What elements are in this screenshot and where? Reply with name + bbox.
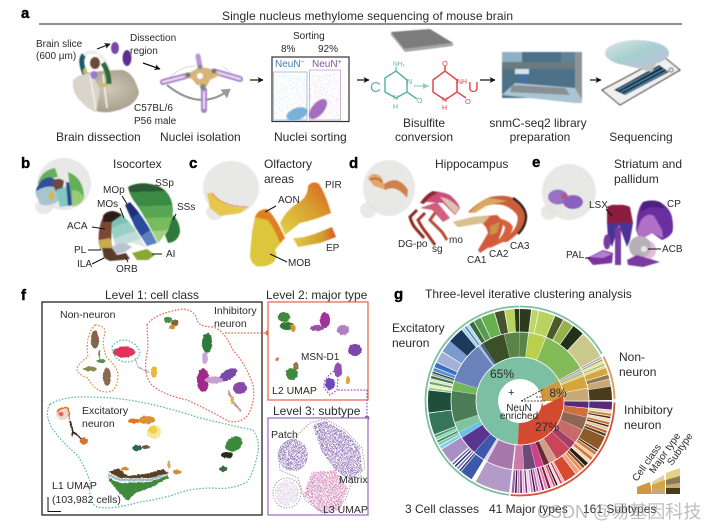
outline: non-neuron xyxy=(77,325,118,392)
chart: FACS sorting scatter: NeuN xyxy=(275,59,301,70)
region labels: ILA xyxy=(77,259,92,270)
clusters: inhibitory xyxy=(135,317,247,411)
region labels: ACA xyxy=(67,221,88,232)
label: NeuN enriched: enriched xyxy=(500,411,538,422)
region labels: SSs xyxy=(177,202,195,213)
step caption: nuclei sorting: Nuclei sorting xyxy=(274,130,347,144)
leader lines xyxy=(88,196,176,264)
step caption: library preparation: preparation xyxy=(510,130,570,144)
scatter cloud: NeuN positive xyxy=(310,74,340,120)
heading: striatum and pallidum: Striatum and xyxy=(614,157,682,171)
icon: cytosine molecule: C xyxy=(370,79,381,96)
workflow title: Single nucleus methylome sequencing of mouse brain xyxy=(222,9,513,23)
arrow: C to U xyxy=(414,85,429,87)
watermark: CSDN @易基因科技 xyxy=(537,502,701,522)
label: non-neuron: neuron xyxy=(619,365,656,379)
icon: dissection region pieces xyxy=(111,42,132,66)
chart: L2 UMAP xyxy=(268,302,368,400)
bottom labels: 161 Subtypes xyxy=(583,502,656,516)
panel: a - workflow xyxy=(21,5,682,144)
clusters: major types xyxy=(276,312,362,390)
region labels: EP xyxy=(326,243,340,254)
outline: inhibitory neuron xyxy=(146,309,254,422)
icon: cytosine molecule: NH₂ xyxy=(393,61,405,68)
region labels: SSp xyxy=(155,178,174,189)
leader lines xyxy=(265,206,287,262)
heading: isocortex: Isocortex xyxy=(113,157,162,171)
legend labels xyxy=(630,431,696,484)
brain region 3D: cortex xyxy=(98,183,180,261)
label: 8 percent: 8% xyxy=(549,386,567,400)
icon: uracil molecule: H xyxy=(442,105,447,112)
chart: L1 UMAP xyxy=(42,302,262,515)
icon: centrifuge rotor xyxy=(163,56,240,110)
label: inhibitory neuron: Inhibitory xyxy=(214,305,257,317)
icon: cytosine molecule: H xyxy=(393,104,398,111)
brain regions: striatum and pallidum xyxy=(587,200,673,267)
brain regions: olfactory xyxy=(250,182,336,266)
panel: e - striatum and pallidum xyxy=(532,154,683,267)
region labels: PIR xyxy=(325,180,342,191)
region labels: sg xyxy=(432,244,443,255)
outline: excitatory neuron xyxy=(47,397,258,508)
label: non-neuron: Non-neuron xyxy=(60,309,116,321)
panel: f - UMAP xyxy=(21,287,369,516)
chart: FACS sorting scatter: + xyxy=(338,59,342,66)
brain slice label: Brain slice xyxy=(36,39,82,50)
heading: striatum and pallidum: pallidum xyxy=(614,172,659,186)
region labels: CP xyxy=(667,199,681,210)
connector: L2 to L3 xyxy=(338,390,369,420)
arrow: bisulfite to library xyxy=(480,79,495,81)
panel letter f: f xyxy=(21,287,27,304)
region labels: ORB xyxy=(116,264,138,275)
panel letter b: b xyxy=(21,155,30,172)
dashed indicator xyxy=(521,389,545,401)
icon: uracil molecule xyxy=(433,59,479,112)
outline: MSN-D1 xyxy=(324,370,338,395)
leader lines xyxy=(585,209,661,258)
mouse strain label: P56 male xyxy=(134,116,177,127)
icon: well plate xyxy=(391,29,453,52)
region labels: MOs xyxy=(97,199,118,210)
label: L1 UMAP: L1 UMAP xyxy=(52,480,97,492)
label: inhibitory neuron: neuron xyxy=(624,418,661,432)
region labels: DG-po xyxy=(398,239,427,250)
icon: uracil molecule: NH xyxy=(457,79,467,86)
label: MSN-D1: MSN-D1 xyxy=(301,352,340,363)
dissection region label: Dissection xyxy=(130,33,176,44)
panel letter g: g xyxy=(394,286,403,303)
bottom labels: 41 Major types xyxy=(489,502,568,516)
legend labels: Subtype xyxy=(665,431,696,468)
axis arrows xyxy=(48,497,61,512)
chart: FACS sorting scatter xyxy=(272,57,349,123)
icon: whole brain isocortex location xyxy=(35,158,91,214)
region labels: CA2 xyxy=(489,249,509,260)
step caption: brain dissection: Brain dissection xyxy=(56,130,141,144)
legend labels: Major type xyxy=(647,431,683,476)
brain regions: CA fields xyxy=(453,196,526,253)
chart: sunburst xyxy=(426,306,614,496)
panel letter a: a xyxy=(21,5,30,22)
chart: L3 UMAP xyxy=(268,418,368,516)
sorting labels: Sorting xyxy=(293,31,325,42)
label: L1 UMAP: (103,982 cells) xyxy=(52,494,121,506)
sunburst ring dividers xyxy=(451,332,589,470)
brain slice label: (600 µm) xyxy=(36,51,76,62)
region labels: MOp xyxy=(103,185,125,196)
bottom labels: 3 Cell classes xyxy=(405,502,479,516)
scatter cloud: NeuN negative xyxy=(274,74,307,120)
icon: whole brain olfactory location xyxy=(203,161,259,220)
step caption: library preparation: snmC-seq2 library xyxy=(489,116,587,130)
ring: major types xyxy=(464,344,576,458)
heading: level 1: Level 1: cell class xyxy=(105,288,199,302)
icon: cytosine molecule: N xyxy=(393,95,398,102)
panel: b - isocortex xyxy=(21,155,195,275)
region labels: PAL xyxy=(566,250,585,261)
panel letter d: d xyxy=(349,155,358,172)
label: non-neuron: Non- xyxy=(619,350,645,364)
label: matrix: Matrix xyxy=(339,474,368,486)
outline: non-neuron pink cluster xyxy=(112,340,140,362)
brain regions: dentate gyrus xyxy=(410,191,460,245)
icon: uracil molecule: O xyxy=(442,59,448,68)
ring: cell classes xyxy=(487,368,553,434)
chart: FACS sorting scatter: NeuN xyxy=(312,59,338,70)
sorting labels: 8% xyxy=(281,44,296,55)
heading: olfactory areas: Olfactory xyxy=(264,157,312,171)
mouse strain label: C57BL/6 xyxy=(134,103,173,114)
arrow: library to sequencing xyxy=(590,79,601,81)
label: excitatory neuron: Excitatory xyxy=(392,321,445,335)
icon: uracil molecule: O xyxy=(465,97,471,106)
arrow: region to isolation xyxy=(143,63,160,69)
cluster: pink non-neuron xyxy=(113,346,135,358)
label: NeuN enriched: NeuN xyxy=(506,403,532,414)
outer arc: class colours xyxy=(426,306,614,496)
icon: uracil molecule: N xyxy=(442,97,447,104)
region labels: CA1 xyxy=(467,255,487,266)
region labels: MOB xyxy=(288,258,311,269)
panel letter e: e xyxy=(532,154,540,171)
arrow: sorting to bisulfite xyxy=(357,79,369,81)
label: 27 percent: 27% xyxy=(535,420,559,434)
icon: sequencing wafer xyxy=(605,40,669,72)
region labels: ACB xyxy=(662,244,683,255)
label: excitatory neuron: neuron xyxy=(392,336,429,350)
dissection region label: region xyxy=(130,46,158,57)
legend labels: Cell class xyxy=(630,442,664,484)
heading: hippocampus: Hippocampus xyxy=(435,157,508,171)
heading: level 3: Level 3: subtype xyxy=(273,404,361,418)
step caption: bisulfite conversion: Bisulfite xyxy=(403,116,445,130)
label: inhibitory neuron: Inhibitory xyxy=(624,403,673,417)
icon: mouse brain with dissected slice xyxy=(73,52,139,112)
region labels: mo xyxy=(449,235,463,246)
label: inhibitory neuron: neuron xyxy=(214,318,247,330)
arrow: slice to region xyxy=(97,44,110,49)
panel: d - hippocampus xyxy=(349,155,530,266)
ring: subtypes xyxy=(440,320,600,482)
heading: olfactory areas: areas xyxy=(264,172,294,186)
label: patch: Patch xyxy=(271,429,298,441)
heading: clustering analysis: Three-level iterative clustering analysis xyxy=(425,287,632,301)
label: excitatory neuron: Excitatory xyxy=(82,405,128,417)
label: L2 UMAP: L2 UMAP xyxy=(272,385,317,397)
arrow: isolation to sorting xyxy=(250,79,263,81)
region labels: CA3 xyxy=(510,241,530,252)
panel: c - olfactory areas xyxy=(189,155,342,269)
chart: FACS sorting scatter: − xyxy=(301,59,305,66)
panel letter c: c xyxy=(189,155,197,172)
clusters: subtypes xyxy=(275,421,362,513)
region labels: PL xyxy=(74,245,87,256)
outline: patch and matrix xyxy=(273,419,365,514)
connector: L1 to L2 xyxy=(225,330,271,336)
step caption: bisulfite conversion: conversion xyxy=(395,130,453,144)
clusters: excitatory xyxy=(56,408,245,501)
step caption: sequencing: Sequencing xyxy=(609,130,673,144)
clusters: non-neuron xyxy=(83,331,111,386)
icon: whole brain hippocampus location xyxy=(360,160,415,218)
icon: whole brain striatum location xyxy=(541,164,596,220)
label: 65 percent: 65% xyxy=(490,367,514,381)
legend: ring key wedge xyxy=(630,431,696,494)
icon: cytosine molecule xyxy=(370,61,423,111)
icon: flow cell xyxy=(602,57,680,105)
label: excitatory neuron: neuron xyxy=(82,418,115,430)
sorting labels: 92% xyxy=(318,44,338,55)
icon: liquid handling machine xyxy=(502,52,582,103)
panel: g - sunburst xyxy=(392,286,701,522)
region labels: AON xyxy=(278,195,300,206)
step caption: nuclei isolation: Nuclei isolation xyxy=(160,130,241,144)
region labels: LSX xyxy=(589,200,608,211)
icon: uracil molecule: U xyxy=(468,79,479,96)
icon: cytosine molecule: N xyxy=(407,79,412,86)
icon: cytosine molecule: O xyxy=(417,98,423,105)
heading: level 2: Level 2: major type xyxy=(266,288,368,302)
label: L3 UMAP: L3 UMAP xyxy=(323,504,368,516)
region labels: AI xyxy=(166,249,175,260)
label: plus sign: + xyxy=(508,387,514,399)
